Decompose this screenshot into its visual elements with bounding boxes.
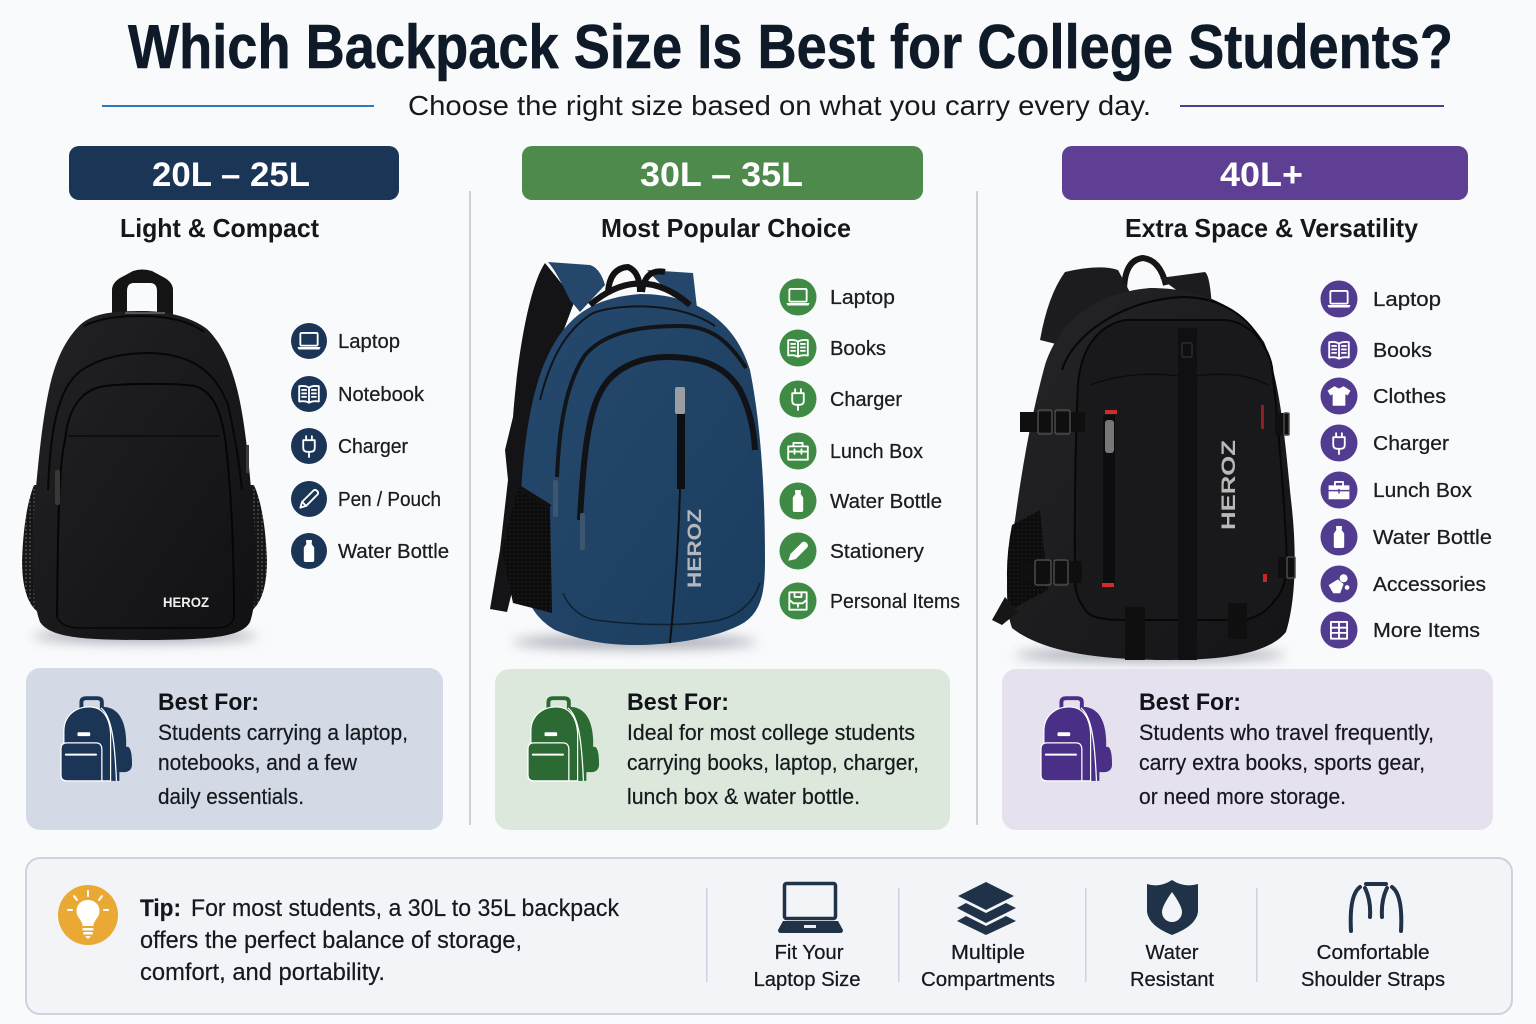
text: best for: carry extra books, sports gear, xyxy=(1139,750,1425,775)
logo: HEROZ: HEROZ xyxy=(685,509,706,588)
item: Lunch Box xyxy=(780,432,923,470)
item: Accessories xyxy=(1320,566,1486,602)
item: Stationery: Stationery xyxy=(830,541,924,563)
list: contents xyxy=(291,323,449,569)
icon: backpack xyxy=(528,698,599,781)
text: best for xyxy=(1139,689,1434,809)
logo: HEROZ: HEROZ xyxy=(1219,439,1240,530)
item: Books: Books xyxy=(830,338,886,360)
feature: compartments xyxy=(921,882,1055,991)
icon: layers xyxy=(957,882,1016,935)
subtitle: Choose the right size based on what you carry every day. xyxy=(408,90,1151,121)
text: best for: carrying books, laptop, charger, xyxy=(627,750,919,775)
item: Accessories: Accessories xyxy=(1373,574,1486,596)
callout: best for 20L xyxy=(26,668,443,830)
panel: tip and features xyxy=(26,858,1512,1014)
item: Lunch Box xyxy=(1320,472,1472,508)
item: Water Bottle xyxy=(291,533,449,569)
item: Stationery xyxy=(780,532,924,570)
item: Notebook: Notebook xyxy=(338,384,425,406)
item: Laptop xyxy=(780,278,895,316)
callout: best for 30L xyxy=(495,669,950,830)
feature: water resistant xyxy=(1130,880,1214,991)
item: Lunch Box: Lunch Box xyxy=(1373,480,1472,502)
feature: laptop size: Fit Your xyxy=(774,942,844,964)
item: Laptop xyxy=(1320,280,1441,318)
feature: compartments: Multiple xyxy=(951,942,1025,964)
backpack: medium blue xyxy=(490,262,765,649)
item: Charger: Charger xyxy=(1373,433,1449,455)
logo: HEROZ: HEROZ xyxy=(163,594,209,610)
feature: water resistant: Water xyxy=(1146,942,1199,964)
item: Books xyxy=(1320,332,1432,368)
backpack: small black xyxy=(22,270,267,643)
text: best for: daily essentials. xyxy=(158,784,304,809)
item: Personal Items xyxy=(780,582,960,620)
badge: 40L+ xyxy=(1062,146,1468,200)
item: Books xyxy=(780,330,886,366)
badge: 20L – 25L: 20L – 25L xyxy=(152,156,310,194)
panel: 20L – 25L xyxy=(22,146,449,830)
item: Charger: Charger xyxy=(338,436,408,458)
item: Books: Books xyxy=(1373,340,1432,362)
callout: best for 40L+ xyxy=(1002,669,1493,830)
feature: compartments: Compartments xyxy=(921,969,1055,991)
badge: 20L – 25L xyxy=(69,146,399,200)
feature: laptop size xyxy=(754,884,860,991)
heading: Light & Compact: Light & Compact xyxy=(120,213,319,243)
item: Charger xyxy=(1320,424,1449,462)
item: More Items: More Items xyxy=(1373,620,1480,642)
icon: laptop xyxy=(778,884,843,933)
list: contents xyxy=(780,278,960,620)
text: best for: notebooks, and a few xyxy=(158,750,357,775)
item: Water Bottle xyxy=(1320,518,1492,556)
text: best for xyxy=(627,689,919,809)
item: Charger xyxy=(291,428,408,464)
heading: Most Popular Choice: Most Popular Choice xyxy=(601,213,851,243)
badge: 40L+: 40L+ xyxy=(1220,156,1303,194)
panel: 40L+ xyxy=(992,146,1493,830)
heading: Extra Space & Versatility: Extra Space & Versatility xyxy=(1125,213,1419,243)
item: Water Bottle: Water Bottle xyxy=(1373,527,1492,549)
text: best for: lunch box & water bottle. xyxy=(627,784,860,809)
text: best for: Best For: xyxy=(627,689,729,716)
icon: backpack xyxy=(61,698,132,781)
item: Laptop: Laptop xyxy=(338,331,400,353)
text: best for: Students who travel frequently, xyxy=(1139,720,1434,745)
item: Personal Items: Personal Items xyxy=(830,591,960,613)
badge: 30L – 35L xyxy=(522,146,923,200)
text: best for xyxy=(158,689,408,809)
icon: light bulb xyxy=(58,885,118,945)
text: tip: offers the perfect balance of storage, xyxy=(140,927,522,954)
item: Clothes xyxy=(1320,378,1446,414)
backpack: large black xyxy=(992,258,1295,662)
item: Clothes: Clothes xyxy=(1373,386,1446,408)
feature: shoulder straps: Shoulder Straps xyxy=(1301,969,1445,991)
text: best for: or need more storage. xyxy=(1139,784,1346,809)
text: tip: comfort, and portability. xyxy=(140,959,385,986)
text: tip: For most students, a 30L to 35L backpack xyxy=(191,895,620,922)
icon: shield xyxy=(1147,880,1198,935)
item: More Items xyxy=(1320,612,1480,648)
item: Laptop xyxy=(291,323,400,359)
item: Charger xyxy=(780,380,902,418)
text: tip xyxy=(140,895,620,986)
feature: shoulder straps xyxy=(1301,884,1445,991)
item: Laptop: Laptop xyxy=(830,287,895,309)
icon: backpack xyxy=(1041,698,1112,781)
text: best for: Ideal for most college students xyxy=(627,720,915,745)
item: Water Bottle: Water Bottle xyxy=(830,491,942,513)
list: contents xyxy=(1320,280,1492,648)
item: Notebook xyxy=(291,376,425,412)
badge: 30L – 35L: 30L – 35L xyxy=(640,156,803,194)
text: tip: Tip: xyxy=(140,895,181,922)
item: Charger: Charger xyxy=(830,389,902,411)
item: Pen / Pouch: Pen / Pouch xyxy=(338,489,441,511)
feature: shoulder straps: Comfortable xyxy=(1316,942,1430,964)
item: Pen / Pouch xyxy=(291,481,441,517)
item: Water Bottle xyxy=(780,482,942,520)
item: Lunch Box: Lunch Box xyxy=(830,441,923,463)
icon: straps xyxy=(1351,884,1401,931)
item: Laptop: Laptop xyxy=(1373,289,1441,311)
feature: water resistant: Resistant xyxy=(1130,969,1214,991)
feature: laptop size: Laptop Size xyxy=(754,969,860,991)
text: best for: Best For: xyxy=(158,689,259,716)
item: Water Bottle: Water Bottle xyxy=(338,541,449,563)
panel: 30L – 35L xyxy=(490,146,960,830)
text: best for: Best For: xyxy=(1139,689,1241,716)
text: best for: Students carrying a laptop, xyxy=(158,720,408,745)
